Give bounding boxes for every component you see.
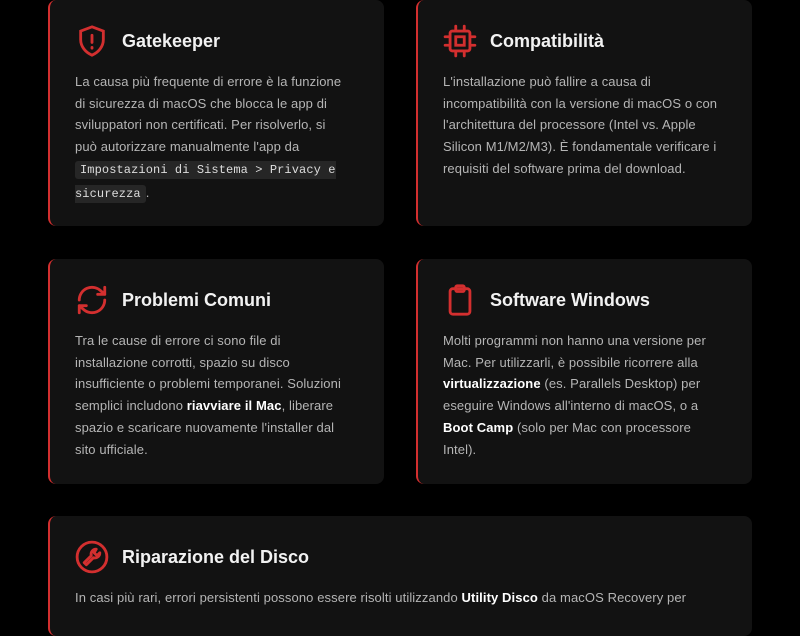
- text: software windows: Molti programmi non hanno una versione per Mac. Per utilizzarli, è possibile ricorrere alla virtualizzazione (es. Parallels Desktop) per eseguire Windows all'interno di macOS, o a Boot Camp (solo per Mac con processore Intel).: [443, 333, 706, 457]
- heading: gatekeeper: Gatekeeper: [122, 30, 220, 50]
- panel: problemi comuni: [48, 259, 384, 484]
- text: problemi comuni: Tra le cause di errore ci sono file di installazione corrotti, spazio su disco insufficiente o problemi temporanei. Soluzioni semplici includono riavviare il Mac, liberare spazio e scaricare nuovamente l'installer dal sito ufficiale.: [75, 333, 341, 457]
- heading: riparazione del disco: [76, 540, 309, 574]
- heading: riparazione del disco: Riparazione del Disco: [122, 546, 309, 566]
- heading: compatibilita: Compatibilità: [490, 30, 604, 50]
- heading: software windows: [448, 284, 650, 316]
- panel: compatibilita: [416, 0, 752, 226]
- heading: problemi comuni: Problemi Comuni: [122, 290, 271, 310]
- text: gatekeeper: La causa più frequente di errore è la funzione di sicurezza di macOS che blocca le app di sviluppatori non certificati. Per risolverlo, si può autorizzare manualmente l'app da Impostazioni di Sistema > Privacy e sicurezza .: [75, 74, 341, 201]
- heading: software windows: Software Windows: [490, 290, 650, 310]
- heading: compatibilita: [444, 24, 604, 58]
- panel: riparazione del disco: [48, 516, 752, 636]
- heading: gatekeeper: [79, 25, 220, 57]
- text: compatibilita: L'installazione può fallire a causa di incompatibilità con la versione di macOS o con l'architettura del processore (Intel vs. Apple Silicon M1/M2/M3). È fondamentale verificare i requisiti del software prima del download.: [443, 74, 717, 176]
- panel: software windows: [416, 259, 752, 484]
- heading: problemi comuni: [78, 286, 271, 314]
- panel: gatekeeper: [48, 0, 384, 226]
- text: riparazione del disco: In casi più rari, errori persistenti possono essere risolti utilizzando Utility Disco da macOS Recovery per: [75, 590, 686, 605]
